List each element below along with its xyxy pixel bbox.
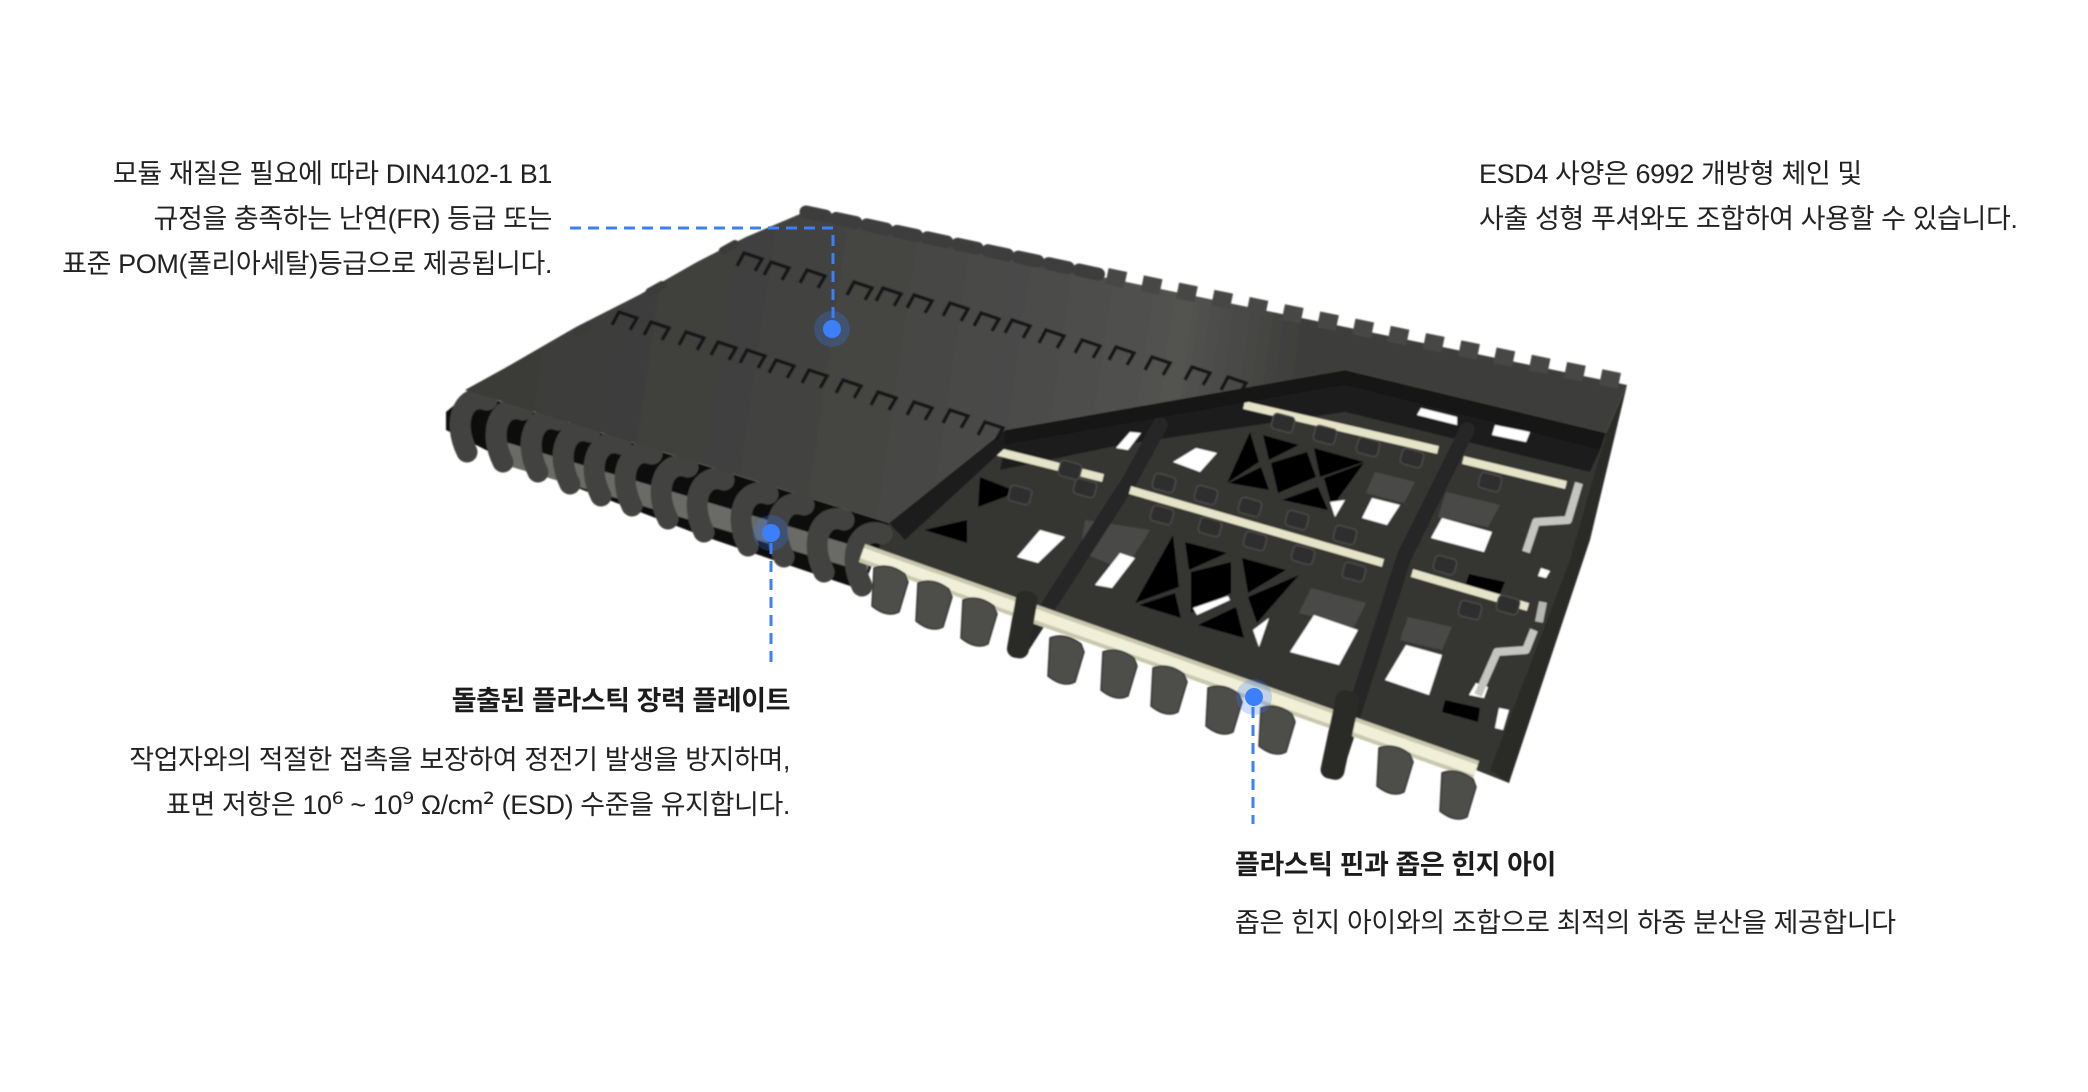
shadow under plate	[1000, 385, 1600, 472]
plate slots row 1	[737, 253, 1246, 395]
right side frame	[1490, 385, 1627, 783]
text: ESD4 description	[1479, 159, 2018, 234]
text: material description: 표준 POM(폴리아세탈)등급으로 제공됩니다.	[62, 249, 552, 279]
raised tabs	[1007, 412, 1521, 621]
leader line: pin	[1252, 707, 1254, 824]
text: material description	[62, 159, 552, 279]
truss openings	[924, 432, 1505, 722]
marker: pin	[1236, 679, 1272, 715]
top cover plate	[465, 214, 1627, 540]
front teeth	[872, 566, 1476, 819]
text: material description: 규정을 충족하는 난연(FR) 등급 또는	[154, 204, 552, 234]
text: tension plate description	[129, 745, 790, 822]
leader line: material	[570, 228, 833, 318]
metal hooks	[1478, 483, 1579, 695]
recessed panels	[1080, 472, 1500, 650]
text: tension plate description: 표면 저항은 10⁶ ~ 10⁹ Ω/cm² (ESD) 수준을 유지합니다.	[166, 787, 790, 822]
text: ESD4 description: ESD4 사양은 6992 개방형 체인 및	[1479, 159, 1862, 189]
front knuckle band	[446, 392, 889, 590]
text: pin and hinge eye description: 좁은 힌지 아이와의 조합으로 최적의 하중 분산을 제공합니다	[1235, 908, 1896, 938]
link bars	[1020, 425, 1467, 772]
heading: tension plate: 돌출된 플라스틱 장력 플레이트	[452, 686, 790, 716]
plate slots row 2	[612, 312, 1003, 440]
left edge bumps	[478, 244, 735, 388]
front pin	[862, 553, 1476, 770]
open windows	[1017, 408, 1550, 730]
back edge teeth	[806, 212, 1625, 382]
marker: tension plate	[753, 515, 789, 551]
leader line: tension plate	[770, 543, 772, 662]
chain understructure	[862, 370, 1606, 783]
pins	[991, 405, 1566, 607]
text: material description: 모듈 재질은 필요에 따라 DIN4102-1 B1	[113, 159, 552, 189]
marker: material	[814, 311, 850, 347]
heading: pin and hinge eye: 플라스틱 핀과 좁은 힌지 아이	[1235, 850, 1556, 880]
text: ESD4 description: 사출 성형 푸셔와도 조합하여 사용할 수 있습니다.	[1479, 204, 2018, 234]
text: tension plate description: 작업자와의 적절한 접촉을 보장하여 정전기 발생을 방지하며,	[129, 745, 790, 775]
